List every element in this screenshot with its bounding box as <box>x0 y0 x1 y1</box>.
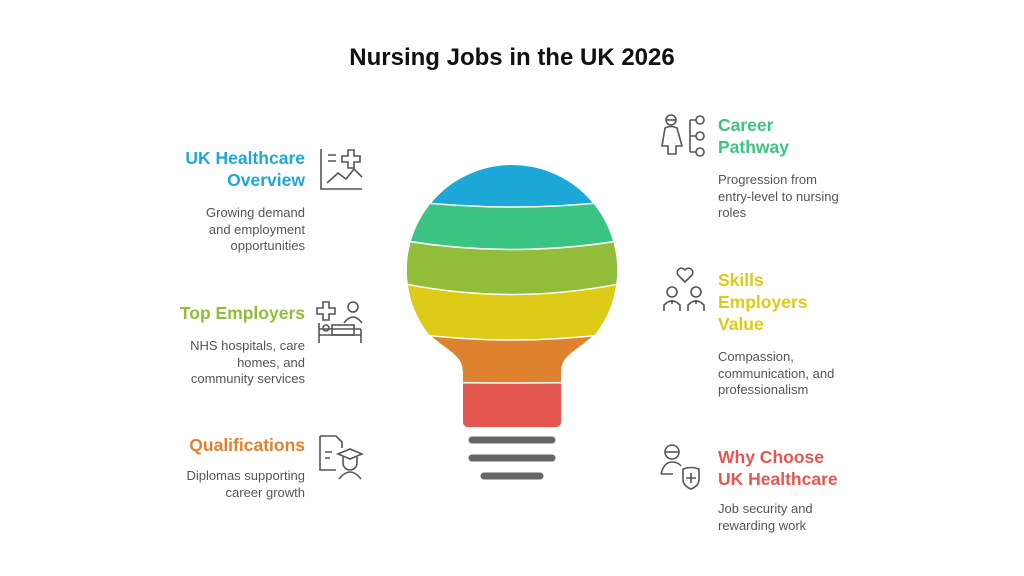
text: employers body <box>190 338 305 386</box>
text: career body: roles <box>718 205 746 220</box>
section: Skills Employers Value: Employers <box>718 292 807 312</box>
text: why body: rewarding work <box>718 518 806 532</box>
icon: chart with cross <box>320 149 362 190</box>
section: Why Choose UK Healthcare: Why Choose <box>718 447 824 467</box>
section: Top Employers: Top Employers <box>180 303 305 323</box>
icon: nurse with branches <box>661 114 705 157</box>
text: qualifications body: Diplomas supporting <box>186 468 305 483</box>
text: overview body: opportunities <box>231 238 305 253</box>
text: qualifications body: career growth <box>226 484 305 500</box>
icon: person with shield <box>660 444 700 490</box>
section: Career Pathway: Pathway <box>718 137 789 157</box>
title: Nursing Jobs in the UK 2026 <box>349 44 675 71</box>
section: UK Healthcare Overview: Overview <box>227 170 305 190</box>
text: employers body: homes, and <box>237 354 305 370</box>
text: overview body: and employment <box>209 222 305 236</box>
lightbulb <box>407 165 617 480</box>
text: employers body: community services <box>191 371 305 386</box>
section: UK Healthcare Overview <box>185 148 305 190</box>
text: skills body: Compassion, <box>718 349 794 364</box>
text: career body: Progression from <box>718 172 817 187</box>
section: Career Pathway: Career <box>718 115 773 135</box>
section: Qualifications: Qualifications <box>189 435 305 455</box>
section: Why Choose UK Healthcare <box>718 447 838 489</box>
section: Skills Employers Value: Skills <box>718 270 764 290</box>
section: Skills Employers Value: Value <box>718 314 764 334</box>
text: overview body: Growing demand <box>206 205 305 220</box>
text: why body <box>718 501 813 532</box>
icon: two people with heart <box>663 267 705 311</box>
section: Career Pathway <box>718 115 789 157</box>
section: Skills Employers Value <box>718 270 807 334</box>
text: why body: Job security and <box>718 501 813 516</box>
text: qualifications body <box>186 468 305 500</box>
text: employers body: NHS hospitals, care <box>190 338 305 353</box>
section: UK Healthcare Overview: UK Healthcare <box>185 148 305 168</box>
text: skills body: professionalism <box>718 382 808 397</box>
icon: document and graduate <box>319 435 364 480</box>
text: overview body <box>206 205 305 253</box>
text: skills body <box>718 349 834 397</box>
text: skills body: communication, and <box>718 366 834 380</box>
text: career body <box>718 172 839 220</box>
section: Why Choose UK Healthcare: UK Healthcare <box>718 469 838 489</box>
icon: hospital bed <box>316 301 362 343</box>
text: career body: entry-level to nursing <box>718 188 839 204</box>
